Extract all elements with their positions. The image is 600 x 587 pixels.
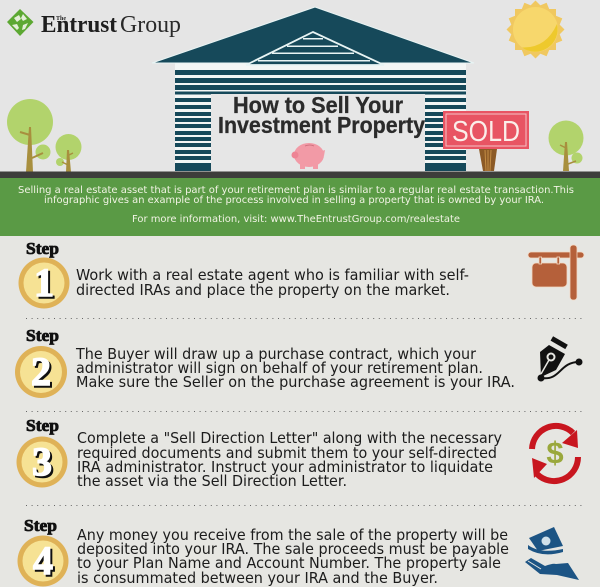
step 4 text: to your Plan Name and Account Number. The property sale [77,554,501,572]
divider [26,504,586,506]
logo: The Entrust Group [7,9,181,38]
house illustration [152,7,474,171]
step 2 text: The Buyer will draw up a purchase contract, which your [75,345,477,363]
step 3 badge: 3 [32,439,52,484]
logo: The Entrust Group: The [56,16,66,22]
step 2 badge [15,346,67,398]
title [218,92,425,138]
step 3 text: Complete a "Sell Direction Letter" along with the necessary [77,429,502,447]
icon: hanging sign [528,245,584,300]
step 3 text: required documents and submit them to your self-directed [77,444,497,462]
divider [26,410,586,412]
green intro banner: infographic gives an example of the process involved in selling a property that is owned by your IRA. [44,195,544,206]
step 2: Step [26,326,59,345]
sold sign [443,111,529,171]
step 3 badge [16,436,68,488]
ground strip [0,172,600,178]
icon: pen tool [538,336,582,382]
icon: piggy bank [292,143,325,169]
step 2 text: Make sure the Seller on the purchase agreement is your IRA. [76,373,515,391]
step 4: Step [24,516,57,535]
step 3: Step [26,416,59,435]
icon: hand holding money [525,527,579,580]
step 2 text: administrator will sign on behalf of your retirement plan. [76,359,483,377]
divider [26,318,586,320]
icon: red arrows with dollar: $ [546,435,564,470]
step 3 badge: 3 [34,441,54,486]
step 1 badge: 1 [34,260,54,305]
step 1 [18,239,584,308]
green intro banner: For more information, visit: www.TheEntrustGroup.com/realestate [132,214,460,225]
step 3 text: the asset via the Sell Direction Letter. [77,472,347,490]
logo: The Entrust Group: Entrust [41,12,117,38]
step 1 text: Work with a real estate agent who is familiar with self- [76,266,469,284]
step 2 badge: 2 [31,349,51,394]
step 2 text [75,345,515,391]
tree: large left [7,99,53,172]
step 1 badge: 1 [36,262,56,307]
step 4 badge [18,536,68,586]
step 4 badge: 4 [35,540,55,585]
step 3 [16,416,578,490]
step 4 text [77,526,509,587]
step 2 [15,326,582,398]
step 1 text [76,266,469,299]
step 2 badge: 2 [33,351,53,396]
step 4 badge: 4 [33,538,53,583]
step 1: Step [26,239,59,258]
title: How to Sell Your [233,92,403,118]
green intro banner [0,178,600,236]
step 4 [18,516,579,587]
step 4 text: is consummated between your IRA and the Buyer. [77,569,438,587]
step 1 badge [18,258,70,308]
sold sign: SOLD [452,116,520,148]
tree: small left [56,134,82,172]
step 4 text: deposited into your IRA. The sale proceeds must be payable [77,540,509,558]
step 3 text: IRA administrator. Instruct your administrator to liquidate [77,458,493,476]
step 1 text: directed IRAs and place the property on the market. [76,281,450,299]
icon: red arrows with dollar [532,426,578,481]
title: Investment Property [218,112,425,138]
tree: right [548,120,584,171]
icon: sun [507,1,564,58]
step 3 text [77,429,502,490]
step 4 text: Any money you receive from the sale of the property will be [77,526,508,544]
logo: The Entrust Group: Group [120,12,181,38]
green intro banner: Selling a real estate asset that is part of your retirement plan is similar to a regular real estate transaction.This [18,185,574,196]
